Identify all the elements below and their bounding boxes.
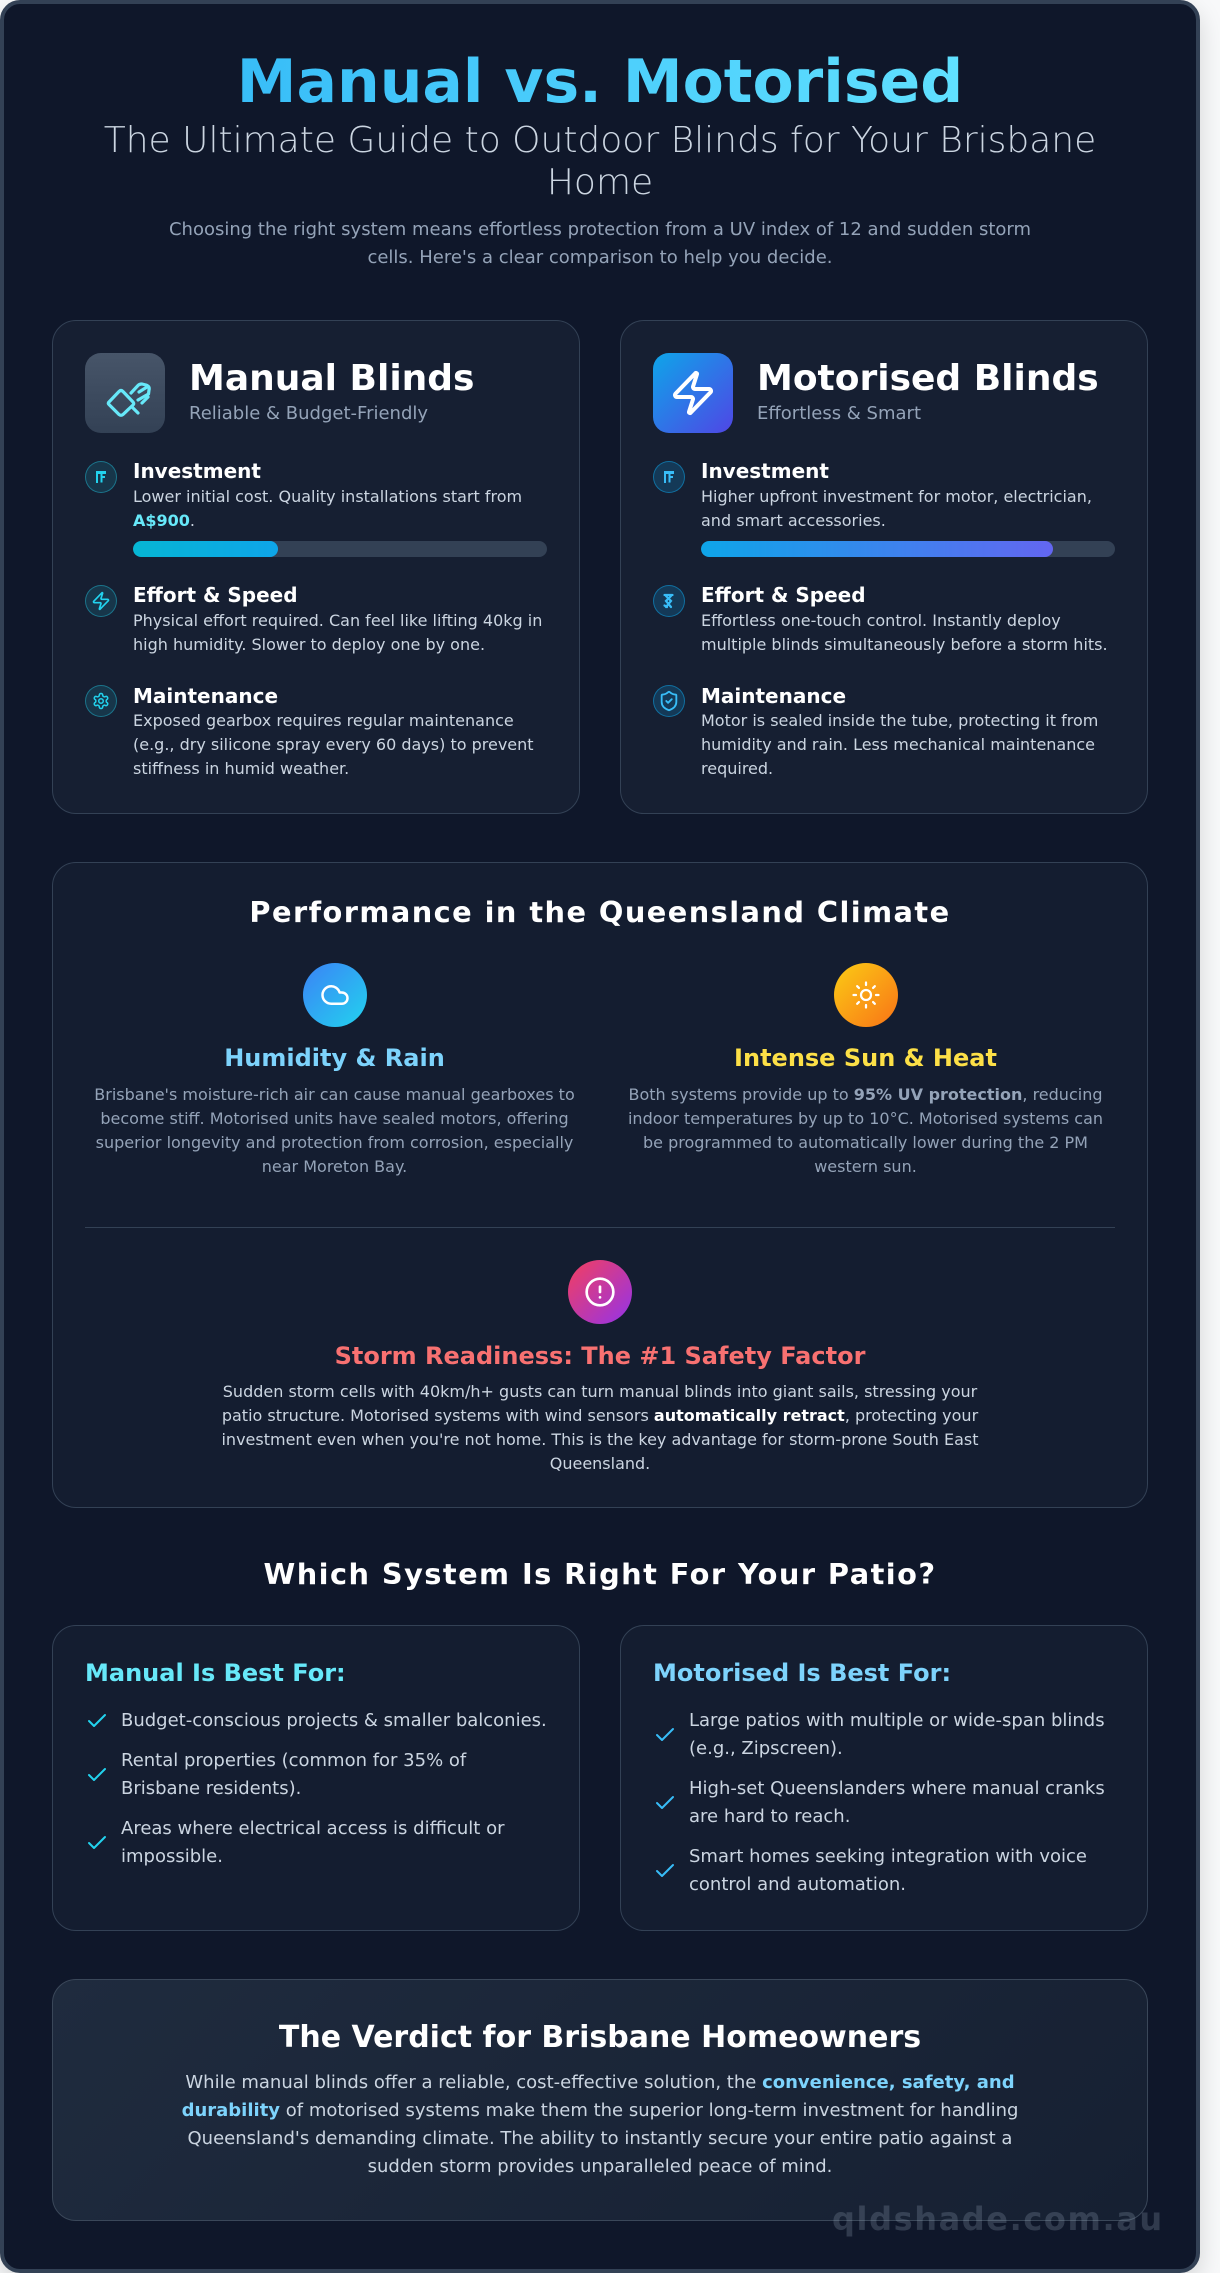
verdict text: Queensland's demanding climate. The ability to instantly secure your entire patio against a xyxy=(188,2128,1012,2149)
list item xyxy=(88,1710,547,1731)
item text: Brisbane residents). xyxy=(121,1778,301,1799)
feature heading: Investment xyxy=(133,459,261,483)
column heading: Intense Sun & Heat xyxy=(734,1044,997,1072)
icon: gear xyxy=(85,685,117,717)
feature text: Motor is sealed inside the tube, protecting it from xyxy=(701,711,1098,730)
feature text xyxy=(701,711,1098,778)
panel: motorised is best for xyxy=(620,1625,1148,1931)
icon: sun xyxy=(834,963,898,1027)
column: humidity and rain xyxy=(94,963,575,1176)
feature text: (e.g., dry silicone spray every 60 days) to prevent xyxy=(133,735,534,754)
item text: Areas where electrical access is difficult or xyxy=(121,1818,504,1839)
feature text: required. xyxy=(701,759,773,778)
tagline: Reliable & Budget-Friendly xyxy=(189,402,428,424)
item text: High-set Queenslanders where manual cranks xyxy=(689,1778,1105,1799)
callout: storm readiness xyxy=(221,1260,978,1473)
feature heading: Maintenance xyxy=(701,684,846,708)
column text: Both systems provide up to 95% UV protection, reducing xyxy=(629,1084,1102,1104)
item text: are hard to reach. xyxy=(689,1806,850,1827)
icon: check xyxy=(88,1768,106,1781)
icon: shield xyxy=(653,685,685,717)
feature heading: Maintenance xyxy=(133,684,278,708)
intro text: Choosing the right system means effortless protection from a UV index of 12 and sudden storm xyxy=(169,219,1031,240)
section heading: Performance in the Queensland Climate xyxy=(249,895,951,929)
icon: check xyxy=(88,1836,106,1849)
panel: performance in the Queensland climate xyxy=(52,862,1148,1508)
icon: check xyxy=(656,1864,674,1877)
item text xyxy=(121,1750,467,1799)
item text xyxy=(121,1818,504,1867)
progress bar: 85% xyxy=(701,540,1115,556)
progress bar: 35% xyxy=(133,540,547,556)
feature text xyxy=(701,487,1092,530)
feature text: stiffness in humid weather. xyxy=(133,759,349,778)
column: intense sun and heat xyxy=(628,963,1103,1176)
feature text: multiple blinds simultaneously before a storm hits. xyxy=(701,635,1108,654)
column text xyxy=(94,1084,575,1176)
verdict text: While manual blinds offer a reliable, cost-effective solution, the convenience, safety, and xyxy=(185,2072,1015,2093)
feature text: Exposed gearbox requires regular maintenance xyxy=(133,711,514,730)
heading: Manual Blinds xyxy=(189,358,474,399)
feature text xyxy=(133,711,534,778)
verdict heading: The Verdict for Brisbane Homeowners xyxy=(279,2020,921,2055)
icon: manual blinds xyxy=(85,353,165,433)
feature heading: Effort & Speed xyxy=(133,583,298,607)
panel: manual is best for xyxy=(52,1625,580,1931)
feature text xyxy=(133,611,542,654)
icon: check xyxy=(656,1728,674,1741)
item text: control and automation. xyxy=(689,1874,906,1895)
panel heading: Manual Is Best For: xyxy=(85,1658,346,1686)
item text: Large patios with multiple or wide-span blinds xyxy=(689,1710,1105,1731)
feature text: Lower initial cost. Quality installations start from xyxy=(133,487,522,506)
icon: check xyxy=(656,1796,674,1809)
feature: investment xyxy=(653,459,1115,557)
item text xyxy=(689,1778,1105,1827)
column text: be programmed to automatically lower during the 2 PM xyxy=(643,1132,1088,1152)
feature text: high humidity. Slower to deploy one by one. xyxy=(133,635,485,654)
verdict text xyxy=(182,2072,1018,2177)
feature text: A$900. xyxy=(133,511,195,530)
icon: alert xyxy=(568,1260,632,1324)
list item xyxy=(88,1750,467,1799)
callout text: investment even when you're not home. This is the key advantage for storm-prone South East xyxy=(221,1430,978,1449)
title: Manual vs. Motorised xyxy=(237,47,963,117)
item text: Budget-conscious projects & smaller balconies. xyxy=(121,1710,547,1731)
item text: (e.g., Zipscreen). xyxy=(689,1738,843,1759)
column heading: Humidity & Rain xyxy=(224,1044,445,1072)
feature text: Higher upfront investment for motor, electrician, xyxy=(701,487,1092,506)
list item xyxy=(656,1846,1087,1895)
feature: maintenance xyxy=(653,684,1098,778)
item text xyxy=(689,1710,1105,1759)
icon: motorised blinds xyxy=(653,353,733,433)
callout text: patio structure. Motorised systems with wind sensors automatically retract, protecting your xyxy=(222,1406,978,1425)
feature: effort and speed xyxy=(653,583,1108,654)
subtitle: The Ultimate Guide to Outdoor Blinds for Your Brisbane xyxy=(104,120,1096,161)
column text: become stiff. Motorised units have sealed motors, offering xyxy=(100,1108,569,1128)
feature: investment xyxy=(85,459,547,557)
column text: indoor temperatures by up to 10°C. Motorised systems can xyxy=(628,1108,1103,1128)
column text: Brisbane's moisture-rich air can cause manual gearboxes to xyxy=(94,1084,575,1104)
feature text: humidity and rain. Less mechanical maintenance xyxy=(701,735,1095,754)
column text: near Moreton Bay. xyxy=(262,1156,407,1176)
item text: Rental properties (common for 35% of xyxy=(121,1750,466,1771)
feature heading: Effort & Speed xyxy=(701,583,866,607)
icon: hourglass xyxy=(653,585,685,617)
list item xyxy=(656,1710,1105,1759)
tagline: Effortless & Smart xyxy=(757,402,921,424)
item text xyxy=(689,1846,1087,1895)
callout text xyxy=(221,1382,978,1473)
icon: investment xyxy=(85,461,117,493)
icon: cloud xyxy=(302,963,366,1027)
feature: maintenance xyxy=(85,684,534,778)
item text: impossible. xyxy=(121,1846,223,1867)
callout text: Queensland. xyxy=(550,1454,650,1473)
icon: investment xyxy=(653,461,685,493)
list item xyxy=(656,1778,1105,1827)
feature heading: Investment xyxy=(701,459,829,483)
column text xyxy=(628,1084,1103,1176)
callout text: Sudden storm cells with 40km/h+ gusts can turn manual blinds into giant sails, stressing your xyxy=(223,1382,977,1401)
icon: lightning xyxy=(85,585,117,617)
feature: effort and speed xyxy=(85,583,542,654)
watermark: qldshade.com.au xyxy=(832,2200,1164,2238)
intro text xyxy=(169,219,1031,268)
feature text: Physical effort required. Can feel like lifting 40kg in xyxy=(133,611,542,630)
verdict text: sudden storm provides unparalleled peace of mind. xyxy=(368,2156,832,2177)
panel: manual blinds xyxy=(52,320,580,814)
list item xyxy=(88,1818,504,1867)
feature text xyxy=(701,611,1108,654)
item text: Smart homes seeking integration with voice xyxy=(689,1846,1087,1867)
column text: superior longevity and protection from corrosion, especially xyxy=(96,1132,573,1152)
subtitle: Home xyxy=(547,162,653,203)
panel: verdict xyxy=(52,1979,1148,2221)
heading: Motorised Blinds xyxy=(757,358,1099,399)
feature text: and smart accessories. xyxy=(701,511,886,530)
icon: check xyxy=(88,1714,106,1727)
column text: western sun. xyxy=(814,1156,917,1176)
feature text xyxy=(133,487,522,530)
callout heading: Storm Readiness: The #1 Safety Factor xyxy=(335,1342,865,1370)
feature text: Effortless one-touch control. Instantly deploy xyxy=(701,611,1061,630)
panel heading: Motorised Is Best For: xyxy=(653,1658,951,1686)
section heading: which system: Which System Is Right For Your Patio? xyxy=(264,1557,936,1591)
verdict text: durability of motorised systems make them the superior long-term investment for handling xyxy=(182,2100,1018,2121)
subtitle xyxy=(104,120,1096,203)
intro text: cells. Here's a clear comparison to help you decide. xyxy=(367,247,833,268)
panel: motorised blinds xyxy=(620,320,1148,814)
